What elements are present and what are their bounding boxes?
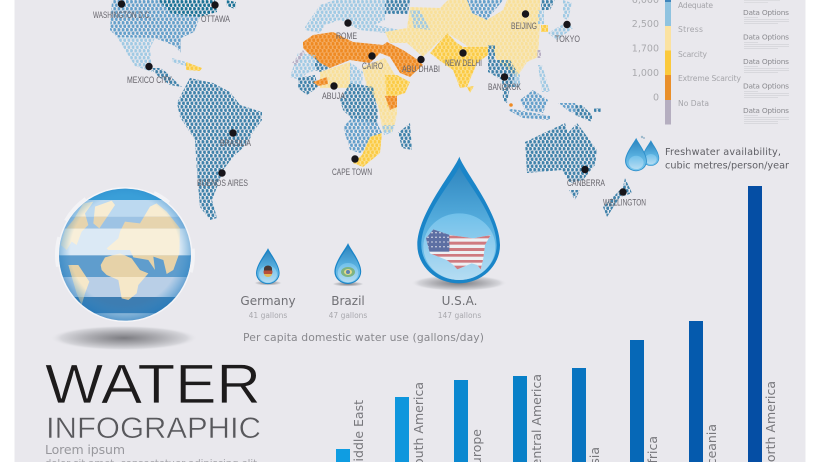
legend categories xyxy=(678,1,742,108)
world map xyxy=(93,0,646,220)
globe sphere xyxy=(57,187,193,323)
city labels: CAPE TOWN xyxy=(332,167,372,177)
data options column: Data Options xyxy=(743,32,789,42)
city labels: WELLINGTON xyxy=(603,198,646,208)
bar: Middle East xyxy=(336,400,366,462)
region: North America xyxy=(110,0,236,87)
caption: per capita water use: Per capita domestic water use (gallons/day) xyxy=(243,331,484,344)
city labels: ABUJA xyxy=(322,91,345,101)
city labels: BEIJING xyxy=(511,21,537,31)
legend colour bar xyxy=(665,0,671,124)
icon: two water drops xyxy=(625,136,659,171)
city labels: ABU DHABI xyxy=(402,64,440,74)
legend categories: No Data xyxy=(678,99,709,108)
city labels: BRASILIA xyxy=(220,138,251,148)
heading: freshwater availability xyxy=(665,147,789,172)
bar chart: water use by region xyxy=(336,186,778,462)
country labels: Germany xyxy=(240,294,296,308)
drop: Brazil xyxy=(332,243,364,286)
legend categories: Scarcity xyxy=(678,50,708,59)
region: South America xyxy=(177,78,262,220)
city labels: ROME xyxy=(336,31,357,41)
country labels: 47 gallons xyxy=(329,311,367,320)
legend values: 2,500 xyxy=(632,19,659,30)
globe xyxy=(50,187,198,350)
legend categories: Stress xyxy=(678,25,703,34)
icon: USA flag map xyxy=(426,230,490,270)
city labels: NEW DELHI xyxy=(445,58,482,68)
legend values xyxy=(632,0,659,104)
heading: freshwater availability: Freshwater availability, xyxy=(665,147,781,158)
region: Africa and Middle East xyxy=(290,32,423,167)
city labels: CAIRO xyxy=(362,61,383,71)
data options column: Data Options xyxy=(743,106,789,115)
region: Asia xyxy=(385,0,573,103)
city markers xyxy=(118,0,627,196)
country labels: 41 gallons xyxy=(249,311,287,320)
city labels xyxy=(93,10,646,208)
country labels: 147 gallons xyxy=(438,311,481,320)
intro text: Lorem ipsum xyxy=(45,442,125,457)
bar: Africa xyxy=(630,340,660,462)
data options column: Data Options xyxy=(743,82,789,90)
legend values: 0 xyxy=(653,92,659,104)
city labels: MEXICO CITY xyxy=(127,75,172,85)
bar: Europe xyxy=(454,380,484,462)
city labels: BUENOS AIRES xyxy=(197,178,248,188)
city labels: TOKYO xyxy=(555,34,580,44)
city labels: WASHINGTON D.C. xyxy=(93,10,151,20)
region: Southeast Asia and New Guinea xyxy=(508,90,601,122)
bar: North America xyxy=(748,186,778,462)
bar: Central America xyxy=(513,374,544,462)
region: Australia and New Zealand xyxy=(525,123,632,217)
legend: freshwater availability scale xyxy=(632,0,789,124)
city labels: BANGKOK xyxy=(488,82,521,92)
data options column: Data Options xyxy=(743,57,789,66)
country labels: U.S.A. xyxy=(442,294,477,308)
data options column xyxy=(743,0,789,124)
drop: Germany xyxy=(254,248,282,286)
heading: freshwater availability: cubic metres/person/year xyxy=(665,160,789,172)
city labels: CANBERRA xyxy=(567,178,605,188)
legend values: 1,000 xyxy=(632,68,659,79)
country labels: Brazil xyxy=(331,294,365,308)
country labels xyxy=(240,294,481,320)
data options column: Data Options xyxy=(743,8,789,17)
title: WATER: WATER xyxy=(45,352,261,415)
city labels: OTTAWA xyxy=(201,14,230,24)
subtitle: INFOGRAPHIC: INFOGRAPHIC xyxy=(46,412,261,445)
legend categories: Extreme Scarcity xyxy=(678,74,742,83)
bar: Oceania xyxy=(689,321,719,462)
bar: Asia xyxy=(572,368,602,462)
intro text xyxy=(45,442,257,462)
globe shadow xyxy=(50,326,198,350)
legend categories: Adequate xyxy=(678,1,713,10)
bar: South America xyxy=(395,382,426,462)
region: Europe xyxy=(305,0,410,33)
legend values: 1,700 xyxy=(632,44,659,54)
drop: U.S.A. xyxy=(411,157,507,291)
